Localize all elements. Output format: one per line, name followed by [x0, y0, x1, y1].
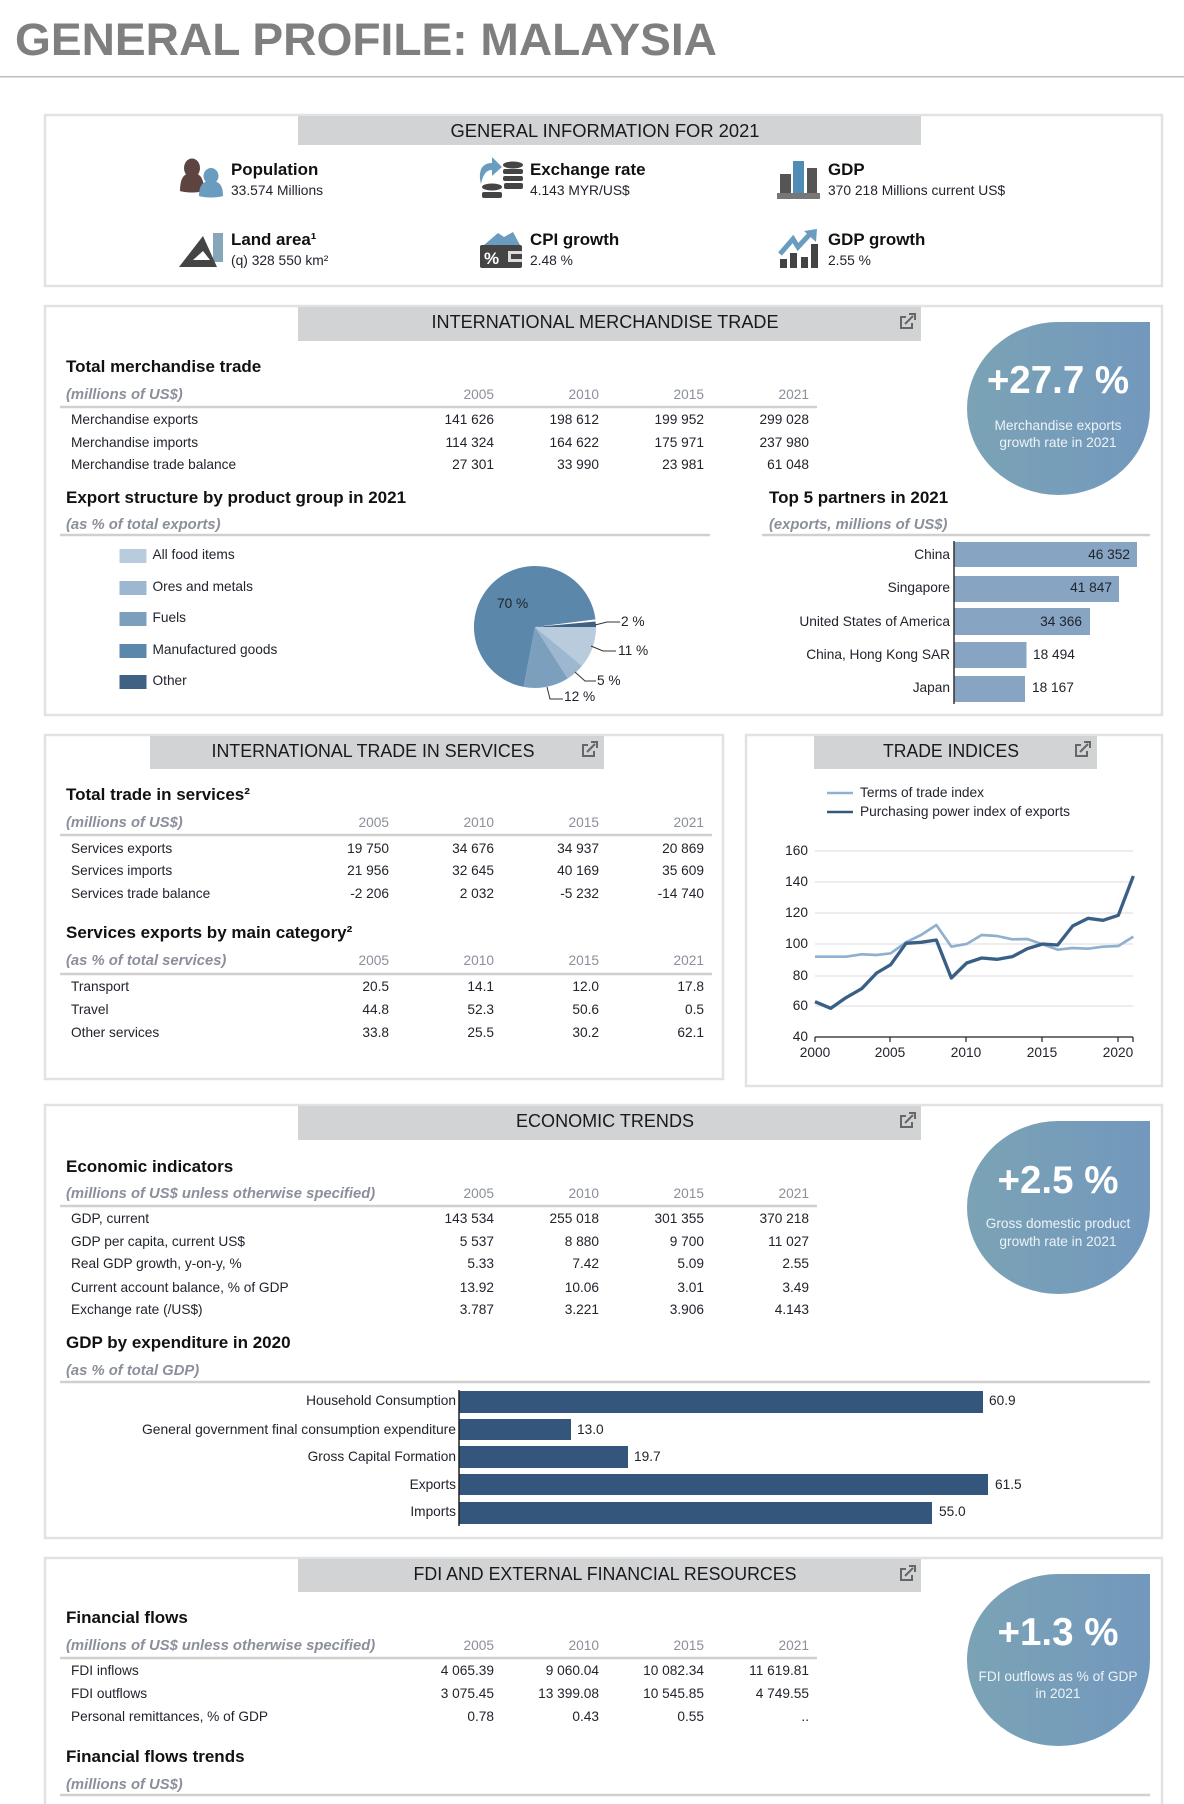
table: total trade in services: 2015 [569, 815, 599, 830]
callout: FDI outflows: FDI outflows as % of GDP [979, 1669, 1137, 1684]
table: financial flows: (millions of US$ unless otherwise specified) [66, 1638, 375, 1654]
heading: merchandise trade [298, 307, 921, 341]
table: total trade in services: 2 032 [460, 886, 494, 901]
table: economic indicators: Exchange rate (/US$) [71, 1302, 203, 1317]
heading: top 5 partners: Top 5 partners in 2021 [769, 488, 948, 507]
table: services exports by category: 30.2 [572, 1025, 599, 1040]
exchange rate text [530, 160, 645, 198]
table: economic indicators: Current account balance, % of GDP [71, 1280, 289, 1295]
table: services exports by category: 52.3 [467, 1002, 494, 1017]
bar chart: top 5 partners: 18 494 [1033, 647, 1075, 662]
pie chart: export structure: 70 % [497, 596, 528, 611]
table: total trade in services: 2010 [464, 815, 494, 830]
callout: FDI outflows: in 2021 [1036, 1686, 1080, 1701]
GDP text: 370 218 Millions current US$ [828, 183, 1005, 198]
pie chart: export structure [474, 566, 648, 704]
table: financial flows: 9 060.04 [546, 1663, 599, 1678]
heading: GDP by expenditure [60, 1333, 1150, 1382]
table: total merchandise trade: (millions of US$) [66, 387, 183, 403]
table: total merchandise trade: 237 980 [760, 435, 809, 450]
line chart: trade indices: 2015 [1027, 1045, 1058, 1060]
population text: Population [231, 160, 318, 179]
line chart: trade indices: 80 [793, 968, 808, 983]
bar chart: GDP by expenditure: 61.5 [995, 1477, 1022, 1492]
table: total trade in services: 32 645 [452, 863, 494, 878]
table: total trade in services: 34 937 [557, 841, 599, 856]
table: economic indicators: 5 537 [460, 1234, 494, 1249]
table: financial flows: FDI inflows [71, 1663, 139, 1678]
table: economic indicators: 3.01 [677, 1280, 704, 1295]
CPI growth text [530, 230, 619, 268]
table: financial flows: FDI outflows [71, 1686, 147, 1701]
line chart: trade indices: 160 [785, 843, 808, 858]
bar chart: top 5 partners [799, 541, 1137, 704]
GDP growth text: 2.55 % [828, 253, 871, 268]
table: financial flows: 4 749.55 [756, 1686, 809, 1701]
table: total merchandise trade: 61 048 [767, 457, 809, 472]
table: economic indicators: 301 355 [655, 1211, 704, 1226]
title: GENERAL PROFILE: MALAYSIA [15, 14, 717, 65]
chart legend [827, 785, 1070, 819]
pie chart: export structure: 11 % [618, 643, 648, 658]
table: total merchandise trade: Merchandise trade balance [71, 457, 236, 472]
table: economic indicators: 2015 [674, 1186, 704, 1201]
table: total merchandise trade: 198 612 [550, 412, 599, 427]
table: financial flows: 2010 [569, 1638, 599, 1653]
table: total trade in services: 2005 [359, 815, 389, 830]
callout: GDP growth: Gross domestic product [986, 1216, 1130, 1231]
bar chart: top 5 partners: China, Hong Kong SAR [806, 647, 950, 662]
table: total merchandise trade: Total merchandise trade [66, 357, 261, 376]
table: services exports by category: 2021 [674, 953, 704, 968]
icon: GDP [777, 161, 820, 199]
table: financial flows: 13 399.08 [538, 1686, 599, 1701]
table: services exports by category: 2005 [359, 953, 389, 968]
bar chart: GDP by expenditure: 19.7 [634, 1449, 661, 1464]
GDP growth text [828, 230, 925, 268]
line chart: trade indices: 60 [793, 998, 808, 1013]
table: economic indicators: 3.221 [565, 1302, 599, 1317]
heading: top 5 partners: (exports, millions of US$) [769, 517, 947, 533]
heading: export structure: (as % of total exports) [66, 517, 221, 533]
callout: merchandise exports growth: Merchandise exports [994, 418, 1122, 433]
table: total trade in services: (millions of US$) [66, 815, 183, 831]
table: financial flows: 10 545.85 [643, 1686, 704, 1701]
heading: export structure [60, 488, 710, 535]
line chart: trade indices: 2005 [875, 1045, 906, 1060]
table: services exports by category: 33.8 [362, 1025, 389, 1040]
exchange rate text: Exchange rate [530, 160, 645, 179]
panel: international merchandise trade [45, 306, 1162, 715]
table: economic indicators: 2010 [569, 1186, 599, 1201]
table: economic indicators: 4.143 [775, 1302, 809, 1317]
callout: FDI outflows: +1.3 % [998, 1611, 1118, 1654]
GDP text: GDP [828, 160, 865, 179]
heading: economic trends: ECONOMIC TRENDS [516, 1111, 694, 1131]
icon: exchange rate [480, 157, 523, 198]
pie chart: export structure: 5 % [597, 673, 621, 688]
table: economic indicators: 9 700 [670, 1234, 704, 1249]
bar chart: GDP by expenditure: 60.9 [989, 1393, 1016, 1408]
table: services exports by category: Other services [71, 1025, 159, 1040]
table: economic indicators: 7.42 [572, 1256, 599, 1271]
table: economic indicators [60, 1157, 817, 1317]
bar chart: top 5 partners: Singapore [888, 580, 950, 595]
table: economic indicators: 370 218 [760, 1211, 809, 1226]
callout: merchandise exports growth [967, 322, 1150, 495]
heading: financial flows trends [60, 1747, 1150, 1795]
table: total merchandise trade: 141 626 [445, 412, 494, 427]
heading: trade in services: INTERNATIONAL TRADE IN SERVICES [212, 741, 534, 761]
legend: product groups: All food items [152, 547, 235, 562]
icon: external link [1076, 742, 1090, 756]
heading: GDP by expenditure: (as % of total GDP) [66, 1363, 199, 1379]
panel: trade indices [746, 735, 1162, 1086]
heading: financial flows trends: (millions of US$) [66, 1777, 183, 1793]
heading: economic trends [298, 1106, 921, 1140]
table: services exports by category: 20.5 [362, 979, 389, 994]
bar chart: GDP by expenditure [142, 1390, 1022, 1526]
table: economic indicators: 11 027 [768, 1234, 809, 1249]
heading: export structure: Export structure by product group in 2021 [66, 488, 406, 507]
heading: FDI: FDI AND EXTERNAL FINANCIAL RESOURCES [414, 1564, 796, 1584]
table: total merchandise trade: Merchandise imports [71, 435, 198, 450]
table: financial flows: Financial flows [66, 1608, 188, 1627]
legend: product groups [120, 547, 277, 689]
table: total merchandise trade: 199 952 [655, 412, 704, 427]
table: financial flows: 2021 [779, 1638, 809, 1653]
table: services exports by category: (as % of total services) [66, 953, 226, 969]
heading: general information [298, 116, 921, 145]
line chart: trade indices: 100 [785, 936, 808, 951]
table: economic indicators: 2021 [779, 1186, 809, 1201]
bar chart: GDP by expenditure: 55.0 [939, 1504, 966, 1519]
table: financial flows: .. [801, 1709, 809, 1724]
table: total merchandise trade: 2021 [779, 387, 809, 402]
icon: external link [901, 1113, 915, 1127]
table: total trade in services: 19 750 [347, 841, 389, 856]
table: financial flows [60, 1608, 817, 1724]
chart legend: Terms of trade index [860, 785, 984, 800]
table: total merchandise trade: 33 990 [557, 457, 599, 472]
legend: product groups: Fuels [152, 610, 186, 625]
table: economic indicators: Real GDP growth, y-on-y, % [71, 1256, 242, 1271]
icon: land area [179, 233, 223, 267]
legend: product groups: Other [152, 673, 187, 688]
heading: merchandise trade: INTERNATIONAL MERCHANDISE TRADE [432, 312, 778, 332]
CPI growth text: CPI growth [530, 230, 619, 249]
table: total trade in services: Total trade in services² [66, 785, 250, 804]
table: total merchandise trade: 23 981 [662, 457, 704, 472]
table: total trade in services: -2 206 [350, 886, 389, 901]
table: financial flows: 0.78 [467, 1709, 494, 1724]
table: economic indicators: 5.09 [677, 1256, 704, 1271]
bar chart: GDP by expenditure: Gross Capital Formation [308, 1449, 456, 1464]
table: total trade in services: -14 740 [658, 886, 704, 901]
table: financial flows: 2005 [464, 1638, 494, 1653]
table: total trade in services: -5 232 [560, 886, 599, 901]
table: financial flows: 2015 [674, 1638, 704, 1653]
table: economic indicators: GDP, current [71, 1211, 149, 1226]
table: financial flows: 11 619.81 [749, 1663, 809, 1678]
table: financial flows: 0.55 [677, 1709, 704, 1724]
table: financial flows: 10 082.34 [643, 1663, 704, 1678]
pie chart: export structure: 2 % [621, 614, 645, 629]
table: total trade in services: 34 676 [452, 841, 494, 856]
table: total merchandise trade: 2010 [569, 387, 599, 402]
callout: FDI outflows [967, 1574, 1150, 1746]
callout: GDP growth: +2.5 % [998, 1159, 1118, 1202]
bar chart: top 5 partners: China [914, 547, 950, 562]
heading: general information: GENERAL INFORMATION FOR 2021 [450, 121, 760, 141]
heading: trade indices: TRADE INDICES [883, 741, 1019, 761]
table: services exports by category: 17.8 [677, 979, 704, 994]
table: total trade in services: Services imports [71, 863, 172, 878]
table: services exports by category: 2015 [569, 953, 599, 968]
line chart: trade indices: 2000 [800, 1045, 831, 1060]
icon: external link [901, 314, 915, 328]
table: economic indicators: 2005 [464, 1186, 494, 1201]
heading: trade indices [814, 736, 1097, 769]
table: services exports by category: Services exports by main category² [66, 923, 353, 942]
table: economic indicators: 255 018 [550, 1211, 599, 1226]
table: services exports by category: 0.5 [685, 1002, 704, 1017]
bar chart: top 5 partners: 46 352 [1088, 547, 1130, 562]
bar chart: GDP by expenditure: General government final consumption expenditure [142, 1422, 456, 1437]
table: economic indicators: 10.06 [565, 1280, 599, 1295]
chart legend: Purchasing power index of exports [860, 804, 1070, 819]
table: economic indicators: 3.787 [460, 1302, 494, 1317]
land area text [231, 230, 329, 268]
bar chart: GDP by expenditure: Household Consumption [306, 1393, 456, 1408]
table: total trade in services: Services exports [71, 841, 172, 856]
CPI growth text: 2.48 % [530, 253, 573, 268]
icon: CPI growth [480, 232, 522, 268]
table: services exports by category: Travel [71, 1002, 109, 1017]
heading: financial flows trends: Financial flows trends [66, 1747, 245, 1766]
heading: FDI [298, 1559, 921, 1592]
callout: GDP growth [967, 1121, 1150, 1294]
bar chart: GDP by expenditure: 13.0 [577, 1422, 604, 1437]
icon: population [180, 158, 223, 198]
table: total trade in services: 35 609 [662, 863, 704, 878]
table: total merchandise trade: 114 324 [446, 435, 494, 450]
table: economic indicators: 5.33 [467, 1256, 494, 1271]
line chart: trade indices: 120 [785, 905, 808, 920]
table: total merchandise trade: 164 622 [550, 435, 599, 450]
callout: merchandise exports growth: +27.7 % [987, 359, 1129, 402]
heading: top 5 partners [762, 488, 1150, 535]
table: economic indicators: GDP per capita, current US$ [71, 1234, 245, 1249]
panel: general information [45, 115, 1162, 286]
heading: GDP by expenditure: GDP by expenditure in 2020 [66, 1333, 291, 1352]
table: economic indicators: 8 880 [565, 1234, 599, 1249]
table: economic indicators: 2.55 [782, 1256, 809, 1271]
table: services exports by category: 25.5 [467, 1025, 494, 1040]
pie chart: export structure: 12 % [564, 689, 595, 704]
callout: GDP growth: growth rate in 2021 [999, 1234, 1117, 1249]
table: economic indicators: 3.49 [782, 1280, 809, 1295]
callout: merchandise exports growth: growth rate in 2021 [999, 435, 1117, 450]
bar chart: top 5 partners: Japan [913, 680, 950, 695]
line chart: trade indices: 140 [785, 874, 808, 889]
table: services exports by category: 2010 [464, 953, 494, 968]
table: economic indicators: 13.92 [460, 1280, 494, 1295]
legend: product groups: Ores and metals [152, 579, 253, 594]
bar chart: GDP by expenditure: Imports [410, 1504, 456, 1519]
table: total merchandise trade: 2005 [464, 387, 494, 402]
line chart: trade indices: 2020 [1103, 1045, 1134, 1060]
line chart: trade indices: 40 [793, 1029, 808, 1044]
population text [231, 160, 323, 198]
bar chart: top 5 partners: 18 167 [1032, 680, 1074, 695]
table: services exports by category: 12.0 [572, 979, 599, 994]
table: services exports by category: 14.1 [467, 979, 494, 994]
table: total merchandise trade: 175 971 [655, 435, 704, 450]
line chart: trade indices: 2010 [951, 1045, 982, 1060]
legend: product groups: Manufactured goods [152, 642, 277, 657]
panel: economic trends [45, 1105, 1162, 1538]
bar chart: top 5 partners: 34 366 [1040, 614, 1082, 629]
table: total trade in services: Services trade balance [71, 886, 210, 901]
table: total trade in services: 20 869 [662, 841, 704, 856]
table: total merchandise trade: 2015 [674, 387, 704, 402]
icon: GDP growth [780, 229, 818, 268]
table: total merchandise trade [60, 357, 817, 472]
bar chart: top 5 partners: 41 847 [1070, 580, 1112, 595]
panel: international trade in services [45, 735, 723, 1079]
exchange rate text: 4.143 MYR/US$ [530, 183, 630, 198]
table: services exports by category: Transport [71, 979, 129, 994]
line chart: trade indices [785, 843, 1134, 1060]
panel: FDI and external financial resources [45, 1558, 1162, 1804]
population text: 33.574 Millions [231, 183, 323, 198]
table: economic indicators: 143 534 [445, 1211, 494, 1226]
land area text: Land area¹ [231, 230, 317, 249]
table: total trade in services: 2021 [674, 815, 704, 830]
GDP text [828, 160, 1005, 198]
table: services exports by category [60, 923, 712, 1040]
table: total trade in services [60, 785, 712, 901]
GDP growth text: GDP growth [828, 230, 925, 249]
table: total merchandise trade: Merchandise exports [71, 412, 198, 427]
table: total merchandise trade: 299 028 [760, 412, 809, 427]
land area text: (q) 328 550 km² [231, 253, 329, 268]
table: financial flows: 0.43 [572, 1709, 599, 1724]
table: services exports by category: 50.6 [572, 1002, 599, 1017]
table: economic indicators: (millions of US$ unless otherwise specified) [66, 1186, 375, 1202]
bar chart: top 5 partners: United States of America [799, 614, 950, 629]
table: economic indicators: Economic indicators [66, 1157, 233, 1176]
table: economic indicators: 3.906 [670, 1302, 704, 1317]
table: financial flows: Personal remittances, % of GDP [71, 1709, 268, 1724]
table: financial flows: 4 065.39 [441, 1663, 494, 1678]
table: financial flows: 3 075.45 [441, 1686, 494, 1701]
icon: external link [583, 742, 597, 756]
table: services exports by category: 44.8 [362, 1002, 389, 1017]
table: total trade in services: 21 956 [347, 863, 389, 878]
bar chart: GDP by expenditure: Exports [410, 1477, 456, 1492]
heading: trade in services [150, 736, 604, 769]
table: total trade in services: 40 169 [557, 863, 599, 878]
icon: CPI growth: % [484, 249, 499, 268]
icon: external link [901, 1566, 915, 1580]
table: services exports by category: 62.1 [677, 1025, 704, 1040]
table: total merchandise trade: 27 301 [452, 457, 494, 472]
